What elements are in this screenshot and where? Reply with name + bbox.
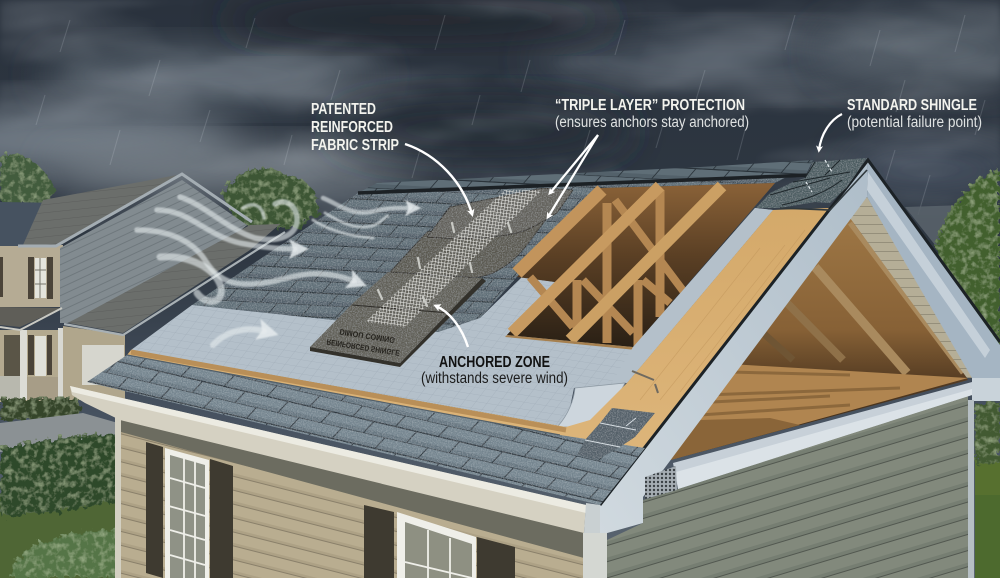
anchor nails xyxy=(378,223,511,306)
label: triple layer protection: (ensures anchors stay anchored) xyxy=(555,114,749,131)
wind swirl small xyxy=(243,205,264,218)
background: neighbouring house xyxy=(0,174,285,402)
ridge vent xyxy=(358,175,812,193)
label: patented fabric strip: FABRIC STRIP xyxy=(311,137,399,154)
label: triple layer protection xyxy=(555,97,749,131)
label: anchored zone: ANCHORED ZONE xyxy=(439,354,550,371)
label: standard shingle xyxy=(847,97,982,131)
label: triple layer protection: “TRIPLE LAYER” PROTECTION xyxy=(555,97,745,114)
background: right tree and distant roof xyxy=(905,170,1000,360)
triple layer anchored shingle patch xyxy=(310,188,573,367)
label: anchored zone xyxy=(421,354,568,387)
bottom layer: reinforced shingle xyxy=(310,272,486,367)
corner trim on side wall xyxy=(968,400,974,578)
lower shingle course xyxy=(87,355,655,505)
label: anchored zone: (withstands severe wind) xyxy=(421,370,568,387)
wind streams xyxy=(137,197,410,345)
loose nails on sheathing xyxy=(632,371,658,393)
printed shingle text: REINFORCED SHINGLE xyxy=(326,337,401,358)
front wall with siding xyxy=(115,415,584,578)
right window with shutters xyxy=(364,505,515,578)
gable trim xyxy=(600,160,1000,535)
standard shingle at the ridge end xyxy=(756,158,867,210)
wind arrow upper right xyxy=(323,198,410,213)
gable interior: attic xyxy=(663,197,968,462)
wind arrow on underlayment xyxy=(213,329,264,345)
wood sheathing xyxy=(127,208,829,455)
arrow: standard shingle pointer xyxy=(819,114,842,150)
gable soffit panel xyxy=(850,197,975,378)
underlayment sheet xyxy=(131,208,773,427)
arrow: fabric strip pointer xyxy=(405,144,472,214)
rain streaks xyxy=(36,15,985,235)
label: standard shingle: (potential failure point) xyxy=(847,114,982,131)
truss opening xyxy=(505,183,775,350)
wind streaks upper right xyxy=(313,213,388,238)
curled underlayment corner xyxy=(558,383,625,427)
arrows: triple layer pointers xyxy=(548,135,598,217)
wind arrow 2 xyxy=(137,230,354,284)
label: patented fabric strip: PATENTED xyxy=(311,101,376,118)
background: driveway, hedges, lawn xyxy=(0,398,1000,578)
middle layer xyxy=(390,210,553,278)
wind swirl low xyxy=(160,257,221,301)
wind swirl top xyxy=(180,197,297,239)
printed shingle text: DIMOU COMING xyxy=(339,327,396,345)
fabric mesh strip xyxy=(365,190,542,327)
soffit fascia band and vent xyxy=(645,382,972,499)
drip edges xyxy=(600,160,1000,505)
label: patented fabric strip: REINFORCED xyxy=(311,119,393,136)
label: patented fabric strip xyxy=(311,101,399,154)
side wall siding xyxy=(607,395,968,578)
metal flashing strip xyxy=(612,208,773,383)
fascia and gutter xyxy=(70,386,607,578)
wind arrow 1 xyxy=(157,210,295,249)
house: upper shingled roof plane xyxy=(192,160,815,332)
arrow: anchored zone pointer xyxy=(436,306,468,347)
printed shingle text xyxy=(326,327,401,358)
top layer xyxy=(427,188,573,239)
left window with shutters xyxy=(146,442,233,578)
background: trees behind left house xyxy=(0,154,319,228)
